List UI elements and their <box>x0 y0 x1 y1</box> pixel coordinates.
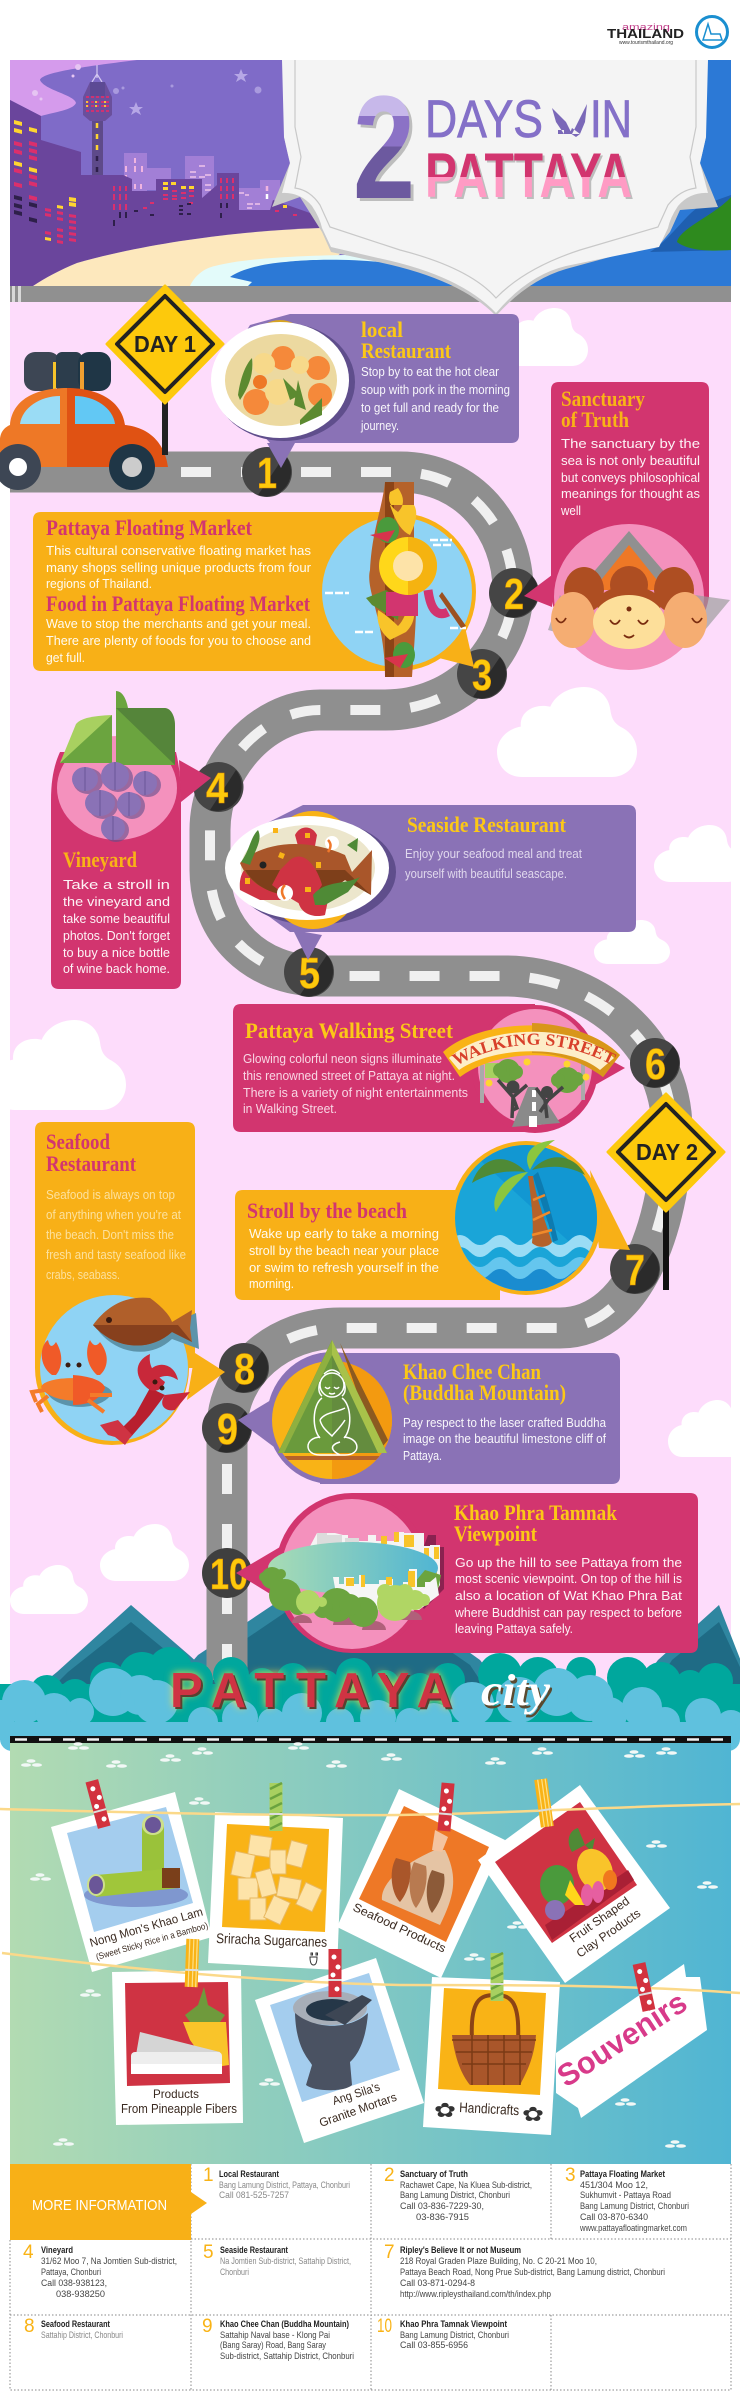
day 2 sign: DAY 2 <box>636 1139 698 1165</box>
marker 6 <box>630 1038 680 1089</box>
info 3: www.pattayafloatingmarket.com <box>579 2223 687 2234</box>
info 10: Call 03-855-6956 <box>400 2340 468 2351</box>
logos <box>607 16 728 48</box>
info 7 <box>384 2242 665 2300</box>
info 8 <box>24 2316 123 2341</box>
marker 5: 5 <box>299 949 320 998</box>
text: leaving Pattaya safely. <box>455 1621 573 1636</box>
text <box>243 1051 468 1116</box>
info 5: 5 <box>203 2242 214 2263</box>
info 1: Local Restaurant <box>219 2169 280 2180</box>
panel: seaside restaurant <box>225 805 636 960</box>
info 2 <box>384 2165 532 2223</box>
info 2: 2 <box>384 2165 395 2186</box>
marker 1: 1 <box>257 449 277 498</box>
city silhouette <box>10 100 322 286</box>
mountains <box>10 1560 740 1710</box>
info 4: 038-938250 <box>56 2289 105 2300</box>
info 3: 451/304 Moo 12, <box>580 2180 648 2191</box>
card: nong mon's khao lam: (Sweet Sticky Rice in a Bamboo) <box>95 1920 209 1962</box>
logo: Amazing Thailand <box>607 22 684 46</box>
text: Glowing colorful neon signs illuminate <box>243 1051 442 1066</box>
tree line <box>0 1647 740 1751</box>
heading: Pattaya Floating Market <box>46 515 253 540</box>
heading: Seafood <box>46 1129 110 1154</box>
text: Wave to stop the merchants and get your meal. <box>46 616 311 631</box>
info 5: Na Jomtien Sub-district, Sattahip District, <box>220 2256 351 2267</box>
text: stroll by the beach near your place <box>249 1243 439 1258</box>
icon: fish crab lobster <box>32 1298 199 1445</box>
info 10 <box>377 2316 509 2351</box>
luggage <box>24 352 111 391</box>
card: nong mon's khao lam <box>51 1792 212 1972</box>
text: well <box>560 503 581 518</box>
panel: souvenirs <box>0 1742 740 2164</box>
info 4: Call 038-938123, <box>41 2278 107 2289</box>
info 8: Seafood Restaurant <box>41 2319 111 2330</box>
pattaya city lettering: city <box>481 1666 551 1715</box>
icon: market boat <box>366 482 466 677</box>
text <box>405 846 582 881</box>
text: in Walking Street. <box>243 1101 337 1116</box>
info 1: 1 <box>203 2165 214 2186</box>
info 4: Vineyard <box>41 2245 73 2256</box>
card: pineapple fibers: Products <box>153 2087 199 2101</box>
road band under hero <box>10 286 731 302</box>
heading: Viewpoint <box>454 1521 538 1546</box>
text: this renowned street of Pattaya at night. <box>243 1068 455 1083</box>
heading: Sanctuary <box>561 386 645 411</box>
info 7: 218 Royal Graden Plaze Building, No. C 20-21 Moo 10, <box>400 2256 597 2267</box>
text: meanings for thought as <box>561 486 700 501</box>
text: or swim to refresh yourself in the <box>249 1260 439 1275</box>
text <box>454 1555 682 1636</box>
text: most scenic viewpoint. On top of the hill is <box>455 1571 682 1586</box>
info 7: Call 03-871-0294-8 <box>400 2278 475 2289</box>
panel: vineyard <box>51 691 211 989</box>
title text: 2 <box>356 69 418 233</box>
number markers <box>194 447 680 1599</box>
text: where Buddhist can pay respect to before <box>454 1605 682 1620</box>
title text: IN <box>590 90 632 149</box>
heading: (Buddha Mountain) <box>403 1380 566 1405</box>
info 4: Pattaya, Chonburi <box>41 2267 101 2278</box>
info 7: Pattaya Beach Road, Nong Prue Sub-district, Bang Lamung district, Chonburi <box>400 2267 665 2278</box>
info 5: Chonburi <box>220 2267 249 2278</box>
info 10: Bang Lamung District, Chonburi <box>400 2330 509 2341</box>
text: get full. <box>46 650 85 665</box>
card: seafood products <box>337 1789 505 1978</box>
text: There are plenty of foods for you to choose and <box>46 633 311 648</box>
info 1: Bang Lamung District, Pattaya, Chonburi <box>219 2180 350 2191</box>
text: take some beautiful <box>63 911 170 926</box>
text: but conveys philosophical <box>561 470 700 485</box>
info 4 <box>23 2242 177 2300</box>
info 10: Khao Phra Tamnak Viewpoint <box>400 2319 508 2330</box>
heading <box>561 386 645 432</box>
text: journey. <box>360 418 399 433</box>
card: ang sila's granite mortars: Granite Mortars <box>317 2090 398 2130</box>
pattaya city lettering: PATTAYA <box>172 1666 454 1720</box>
title text: DAYS <box>425 90 543 149</box>
heading: Restaurant <box>361 338 452 363</box>
wheels <box>0 444 155 490</box>
info 4: 4 <box>23 2242 34 2263</box>
panel: walking street <box>233 1004 625 1133</box>
info 9: 9 <box>202 2316 213 2337</box>
icon: buddha mountain <box>278 1340 392 1480</box>
panel: khao phra tamnak viewpoint <box>236 1493 698 1653</box>
card: pineapple fibers: From Pineapple Fibers <box>121 2101 237 2116</box>
info 1: Call 081-525-7257 <box>219 2190 289 2201</box>
info 2: Call 03-836-7229-30, <box>400 2201 484 2212</box>
text: The sanctuary by the <box>561 436 700 451</box>
text: to buy a nice bottle <box>63 945 170 960</box>
panel: khao chee chan <box>238 1340 620 1484</box>
text: sea is not only beautiful <box>561 453 700 468</box>
text: crabs, seabass. <box>46 1267 120 1282</box>
icon: viewpoint lagoon <box>259 1532 444 1630</box>
card: fruit shaped clay products <box>478 1785 670 1983</box>
pattaya city lettering: PATTAYA <box>170 1664 452 1718</box>
icon: walking street scene <box>482 1058 590 1127</box>
heading <box>403 1359 566 1405</box>
pink background <box>10 302 731 1744</box>
hero scene <box>10 60 731 286</box>
card: fruit shaped clay products: Clay Products <box>574 1906 643 1960</box>
tower <box>83 65 112 178</box>
marker 7: 7 <box>625 1246 645 1295</box>
text: Wake up early to take a morning <box>249 1226 439 1241</box>
city windows <box>14 120 297 244</box>
text: Pay respect to the laser crafted Buddha <box>403 1415 607 1430</box>
text: Enjoy your seafood meal and treat <box>405 846 582 861</box>
info 2: Bang Lamung District, Chonburi <box>400 2190 510 2201</box>
clothes pegs <box>86 1778 655 2012</box>
marker 4: 4 <box>206 764 228 813</box>
logo: Amazing Thailand: amazing <box>622 22 670 32</box>
marker 3 <box>457 649 507 700</box>
banner: souvenirs: Souvenirs <box>551 1984 693 2094</box>
text: regions of Thailand. <box>46 576 152 591</box>
icon: soup plate <box>211 322 349 438</box>
panel: local restaurant <box>211 314 519 468</box>
card: nong mon's khao lam: Nong Mon's Khao Lam <box>88 1905 204 1950</box>
sea foam <box>190 255 420 286</box>
title text: PATTAYA <box>425 141 632 211</box>
card: handicrafts <box>423 1977 560 2135</box>
marker 9 <box>202 1403 252 1454</box>
info 2: Rachawet Cape, Na Kluea Sub-district, <box>400 2180 532 2191</box>
marker 9: 9 <box>217 1405 238 1454</box>
pattaya city lettering: city <box>483 1669 553 1718</box>
text <box>63 877 170 976</box>
icon: three buddha heads <box>548 531 730 649</box>
info 7: 7 <box>384 2242 395 2263</box>
more information label: MORE INFORMATION <box>32 2197 167 2214</box>
info 5: Seaside Restaurant <box>220 2245 289 2256</box>
info 5 <box>203 2242 351 2278</box>
info 2: 03-836-7915 <box>416 2212 469 2223</box>
text: the beach. Don't miss the <box>46 1227 174 1242</box>
info 3: Pattaya Floating Market <box>580 2169 666 2180</box>
text <box>46 543 312 591</box>
info 2: Sanctuary of Truth <box>400 2169 468 2180</box>
card: ang sila's granite mortars <box>255 1958 424 2143</box>
info 3: 3 <box>565 2165 576 2186</box>
heading: Food in Pattaya Floating Market <box>46 591 311 616</box>
more information table <box>10 2164 731 2390</box>
info 7: Ripley's Believe It or not Museum <box>400 2245 521 2256</box>
marker 8: 8 <box>234 1345 255 1394</box>
heading: Restaurant <box>46 1151 137 1176</box>
heading: Vineyard <box>63 847 137 872</box>
banner: walking street <box>443 1023 620 1077</box>
beach sand <box>33 228 345 286</box>
info 9 <box>202 2316 354 2362</box>
text: There is a variety of night entertainments <box>243 1085 468 1100</box>
info 1 <box>203 2165 350 2201</box>
logo: Amazing Thailand: www.tourismthailand.org <box>619 40 673 46</box>
island <box>677 197 731 251</box>
icon: fish plate <box>225 816 389 920</box>
strings <box>0 1804 740 1993</box>
table grid <box>10 2164 731 2390</box>
text: Go up the hill to see Pattaya from the <box>455 1555 682 1570</box>
panel: seafood restaurant <box>32 1122 225 1445</box>
text: the vineyard and <box>63 894 170 909</box>
text: Take a stroll in <box>63 877 170 892</box>
title text: 2 <box>353 66 415 230</box>
heading <box>46 1129 137 1176</box>
panel: pattaya floating market <box>33 482 476 677</box>
info 3: Call 03-870-6340 <box>580 2212 648 2223</box>
text <box>360 364 510 433</box>
text: yourself with beautiful seascape. <box>405 866 567 881</box>
info 9: Sattahip Naval base - Klong Pai <box>220 2330 330 2341</box>
card: fruit shaped clay products: Fruit Shaped <box>567 1894 632 1945</box>
card: handicrafts: Handicrafts <box>459 2099 520 2118</box>
more information label <box>10 2164 207 2240</box>
heading: local <box>361 317 403 342</box>
panel: stroll by the beach <box>235 1140 630 1300</box>
text: also a location of Wat Khao Phra Bat <box>455 1588 682 1603</box>
marker 10: 10 <box>210 1550 248 1599</box>
text: Seafood is always on top <box>46 1187 175 1202</box>
info 9: (Bang Saray) Road, Bang Saray <box>220 2340 326 2351</box>
marker 2: 2 <box>504 570 524 619</box>
text <box>560 436 700 518</box>
card: pineapple fibers <box>112 1970 243 2125</box>
text: many shops selling unique products from four <box>46 560 312 575</box>
banner: souvenirs <box>551 1964 707 2118</box>
panel: sanctuary of truth <box>524 382 730 670</box>
card: seafood products: Seafood Products <box>351 1900 448 1955</box>
card: handicrafts: ✿ <box>434 2100 456 2122</box>
pattaya city lettering: PATTAYA <box>170 1664 452 1718</box>
text: This cultural conservative floating market has <box>46 543 311 558</box>
text: Stop by to eat the hot clear <box>361 364 500 379</box>
banner: walking street: WALKING STREET <box>451 1034 616 1064</box>
title shield <box>272 60 718 316</box>
heading: Seaside Restaurant <box>407 812 567 837</box>
clouds <box>0 308 740 1614</box>
text: of anything when you're at <box>46 1207 181 1222</box>
text <box>46 1187 186 1282</box>
info 8: Sattahip District, Chonburi <box>41 2330 123 2341</box>
logo: Amazing Thailand: THAILAND <box>607 26 684 41</box>
info 9: Khao Chee Chan (Buddha Mountain) <box>220 2319 349 2330</box>
car <box>0 352 168 490</box>
trees <box>259 1567 378 1627</box>
icon: grapes <box>60 691 175 842</box>
icon: palm and sea <box>455 1140 597 1291</box>
info 9: Sub-district, Sattahip District, Chonburi <box>220 2351 354 2362</box>
day 1 sign: DAY 1 <box>134 331 196 357</box>
text <box>249 1226 439 1291</box>
text: photos. Don't forget <box>63 928 170 943</box>
info 10: 10 <box>377 2316 392 2337</box>
heading: Stroll by the beach <box>247 1198 407 1223</box>
text: fresh and tasty seafood like <box>46 1247 186 1262</box>
marker 2 <box>489 568 539 619</box>
heading <box>454 1500 618 1546</box>
card: ang sila's granite mortars: Ang Sila's <box>331 2080 382 2108</box>
logo: tourism emblem <box>696 16 728 48</box>
card: handicrafts: ✿ <box>522 2104 544 2126</box>
text: soup with pork in the morning <box>361 382 510 397</box>
marker 4 <box>194 762 244 813</box>
marker 6: 6 <box>645 1040 666 1089</box>
heading: Pattaya Walking Street <box>245 1018 454 1043</box>
marker 1 <box>242 447 292 498</box>
text <box>46 616 311 665</box>
text: of wine back home. <box>63 961 170 976</box>
card: sriracha sugarcanes: Sriracha Sugarcanes <box>216 1930 327 1950</box>
text: to get full and ready for the <box>361 400 499 415</box>
info 3: Sukhumvit - Pattaya Road <box>580 2190 671 2201</box>
title text <box>353 66 634 233</box>
text: image on the beautiful limestone cliff of <box>403 1431 606 1446</box>
info 4: 31/62 Moo 7, Na Jomtien Sub-district, <box>41 2256 177 2267</box>
dashed divider <box>10 1736 731 1743</box>
marker 3: 3 <box>472 651 492 700</box>
text <box>403 1415 607 1463</box>
background buildings <box>124 153 280 210</box>
text: Pattaya. <box>403 1448 442 1463</box>
day 2 sign <box>608 1094 724 1290</box>
info 3 <box>565 2165 689 2234</box>
heading <box>361 317 452 363</box>
road <box>10 472 672 1680</box>
marker 8 <box>219 1343 269 1394</box>
card: sriracha sugarcanes <box>208 1812 343 1970</box>
heading: of Truth <box>561 407 629 432</box>
marker 5 <box>284 947 334 998</box>
day 1 sign <box>107 286 223 455</box>
info 7: http://www.ripleysthailand.com/th/index.php <box>400 2289 551 2300</box>
info 3: Bang Lamung District, Chonburi <box>580 2201 689 2212</box>
title text: PATTAYA <box>427 143 634 213</box>
heading: Khao Phra Tamnak <box>454 1500 618 1525</box>
marker 7 <box>610 1244 660 1295</box>
info 8: 8 <box>24 2316 35 2337</box>
heading: Khao Chee Chan <box>403 1359 541 1384</box>
text: morning. <box>249 1276 294 1291</box>
sea <box>230 250 600 286</box>
